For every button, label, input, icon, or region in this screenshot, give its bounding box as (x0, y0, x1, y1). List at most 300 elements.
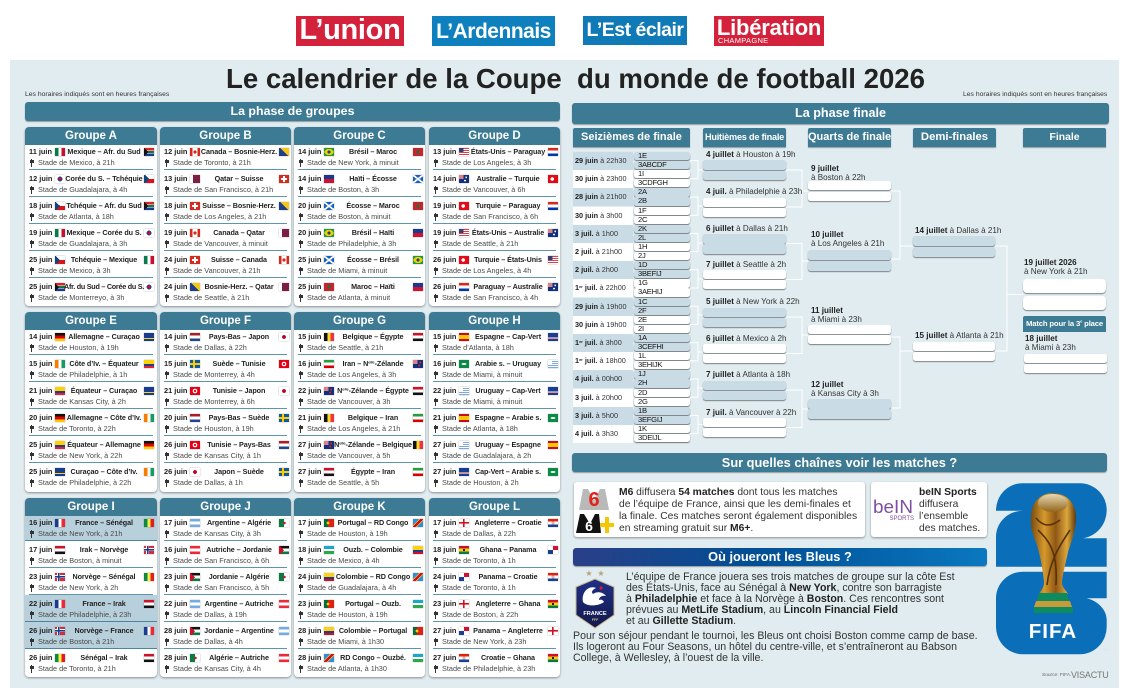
round of 16 matches: 7 juillet à Atlanta à 18h (706, 370, 790, 378)
group F matches: 15 juin (164, 359, 187, 368)
group F matches: Suède – Tunisie (212, 359, 266, 368)
group F matches: Stade de Monterrey, à 6h (173, 397, 255, 406)
icon: France team badge (576, 569, 614, 628)
heading: knockout phase (572, 103, 1109, 124)
group L matches: Stade de Philadelphie, à 23h (442, 664, 535, 673)
group A matches: 18 juin (29, 201, 52, 210)
panel: group L (429, 498, 560, 677)
group E matches: 25 juin (29, 467, 52, 476)
group H matches: Stade d’Atlanta, à 18h (442, 343, 514, 352)
group L heading: Groupe L (469, 501, 520, 513)
icon: beIN Sports logo: SPORTS (889, 516, 914, 522)
group D matches: États-Unis – Australie (472, 228, 544, 237)
FIFA 26 logo with trophy (996, 483, 1108, 654)
group I matches, France games highlighted: Stade de New York, à 2h (38, 583, 118, 592)
heading: TV channels: Sur quelles chaînes voir les matches ? (722, 455, 957, 470)
group E matches: Équateur – Curaçao (71, 386, 137, 395)
group F matches: Stade de Houston, à 19h (173, 424, 254, 433)
panel: group C (294, 127, 425, 306)
round of 32 matches: 1L (638, 351, 646, 360)
round of 32 matches: 30 juin à 3h00 (575, 211, 622, 220)
FIFA wordmark: FIFA (1029, 620, 1077, 643)
third place heading (1023, 316, 1106, 332)
M6 text: en streaming gratuit sur M6+. (619, 523, 753, 534)
group H matches: Stade de Miami, à minuit (442, 370, 522, 379)
group K matches: Ouzb. – Colombie (343, 545, 403, 554)
round of 32 matches: 1H (638, 242, 647, 251)
group I matches, France games highlighted: 23 juin (29, 572, 52, 581)
group J matches: Stade de Kansas City, à 3h (173, 529, 261, 538)
group A heading: Groupe A (65, 130, 117, 142)
group K matches (298, 518, 424, 673)
group D matches: 13 juin (433, 147, 456, 156)
group C matches: 14 juin (298, 174, 321, 183)
final match: 19 juillet 2026 (1024, 258, 1077, 267)
group C matches: Stade de Miami, à minuit (307, 266, 387, 275)
source credit: Source: FIFA. (1042, 673, 1071, 678)
group G matches: Stade de Seattle, à 21h (307, 343, 383, 352)
group G matches: Stade de Vancouver, à 5h (307, 451, 390, 460)
round of 32 matches: 3DEIJL (638, 433, 661, 442)
group E matches: Équateur – Allemagne (67, 440, 141, 449)
group E matches: Stade de New York, à 22h (38, 451, 122, 460)
group A matches: Stade de Atlanta, à 18h (38, 212, 114, 221)
logo: L'union: L’union (300, 14, 400, 46)
group A matches: Stade de Guadalajara, à 3h (38, 239, 127, 248)
group F matches: Pays-Bas – Japon (209, 332, 269, 341)
round of 32 matches: 2J (638, 251, 646, 260)
group C heading: Groupe C (333, 130, 386, 142)
note: time zone right: Les horaires indiqués sont en heures françaises (963, 91, 1107, 98)
group F matches: 14 juin (164, 332, 187, 341)
group C matches: Stade de New York, à minuit (307, 158, 399, 167)
beIN text: diffusera (919, 499, 958, 510)
group A matches: Mexique – Afr. du Sud (67, 147, 141, 156)
group K matches: Stade de Houston, à 19h (307, 529, 388, 538)
group A matches: Stade de Mexico, à 21h (38, 158, 115, 167)
group K matches: Portugal – Ouzb. (345, 599, 401, 608)
group F heading (160, 312, 291, 330)
group K matches: RD Congo – Ouzbé. (340, 653, 406, 662)
round of 16 matches: 4 juillet à Houston à 19h (706, 150, 796, 158)
group L matches: Stade de Dallas, à 22h (442, 529, 516, 538)
group H heading: Groupe H (468, 315, 521, 327)
group B matches: Stade de San Francisco, à 21h (173, 185, 273, 194)
panel: group G (294, 312, 425, 492)
group B matches: 12 juin (164, 147, 187, 156)
group L matches: 17 juin (433, 518, 456, 527)
group A matches: Tchéquie – Afr. du Sud (66, 201, 142, 210)
group C matches (298, 147, 424, 302)
group F heading: Groupe F (200, 315, 251, 327)
group K matches: Portugal – RD Congo (338, 518, 408, 527)
round of 32 matches: 1J (638, 369, 646, 378)
group H matches: Uruguay – Cap-Vert (475, 386, 541, 395)
round of 32 matches: 4 juil. à 3h30 (575, 429, 618, 438)
group J matches: Jordanie – Algérie (209, 572, 269, 581)
group C matches: Stade de Boston, à minuit (307, 212, 391, 221)
group F matches: Pays-Bas – Suède (209, 413, 269, 422)
group J matches: Jordanie – Argentine (204, 626, 274, 635)
group G matches: 27 juin (298, 467, 321, 476)
group B matches: Qatar – Suisse (215, 174, 263, 183)
France text block 1: prévues au MetLife Stadium, au Lincoln Financial Field (626, 604, 898, 616)
group D matches: États-Unis – Paraguay (471, 147, 545, 156)
round of 32 matches: 3CEFHI (638, 342, 664, 351)
group F matches: Stade de Monterrey, à 4h (173, 370, 255, 379)
group J matches: Argentine – Algérie (207, 518, 271, 527)
semi final matches: 14 juillet à Dallas à 21h (915, 226, 1001, 234)
round of 16 matches: 6 juillet à Mexico à 2h (706, 334, 787, 342)
France text block 2: Ils logeront au Four Seasons, un hôtel du centre-ville, et s’entraîneront au Babson (573, 641, 957, 653)
group G matches: Stade de Vancouver, à 3h (307, 397, 390, 406)
group L matches: 27 juin (433, 653, 456, 662)
round heading: round of 16: Huitièmes de finale (705, 132, 784, 142)
group B matches: Suisse – Bosnie-Herz. (202, 201, 276, 210)
France text block 1: des États-Unis, face au Sénégal à New York, contre son barragiste (626, 582, 942, 594)
panel: group J (160, 498, 291, 677)
group H matches: 27 juin (433, 467, 456, 476)
group I matches, France games highlighted (25, 516, 157, 673)
round heading: round of 32: Seizièmes de finale (581, 131, 682, 143)
group J matches: Stade de San Francisco, à 5h (173, 583, 269, 592)
panel: beIN Sports broadcast (871, 482, 987, 537)
group H matches: Espagne – Arabie s. (475, 413, 541, 422)
group A matches: Corée du S. – Tchéquie (65, 174, 143, 183)
panel: group E (25, 312, 157, 492)
group D matches: Stade de Los Angeles, à 3h (442, 158, 531, 167)
round heading: final: Finale (1049, 132, 1080, 143)
group G matches: 22 juin (298, 386, 321, 395)
group K heading (294, 498, 425, 516)
group F matches: Stade de Dallas, à 1h (173, 478, 243, 487)
group I matches, France games highlighted: Stade de Boston, à 21h (38, 637, 114, 646)
round of 32 matches: 3 juil. à 20h00 (575, 393, 622, 402)
group I matches, France games highlighted: 26 juin (29, 626, 52, 635)
group J heading: Groupe J (200, 501, 251, 513)
group H matches: 22 juin (433, 386, 456, 395)
source credit (1042, 670, 1109, 680)
group B matches: 13 juin (164, 174, 187, 183)
group I heading (25, 498, 157, 516)
group I matches, France games highlighted: Sénégal – Irak (80, 653, 128, 662)
group J matches: 17 juin (164, 518, 187, 527)
group B matches: Canada – Bosnie-Herz. (201, 147, 277, 156)
group L matches: Angleterre – Ghana (476, 599, 540, 608)
group C matches: Brésil – Haïti (352, 228, 394, 237)
group C matches: Brésil – Maroc (349, 147, 397, 156)
group H matches: Stade de Guadalajara, à 2h (442, 451, 531, 460)
group C matches: 20 juin (298, 228, 321, 237)
group C matches: Stade de Atlanta, à minuit (307, 293, 390, 302)
group G matches: Iran – Nelle-Zélande (342, 359, 404, 368)
group E heading (25, 312, 157, 330)
group I matches, France games highlighted: 16 juin (29, 518, 52, 527)
group D matches (433, 147, 558, 302)
group B matches: Stade de Seattle, à 21h (173, 293, 249, 302)
heading: TV channels (572, 453, 1107, 472)
group L matches (433, 518, 558, 673)
round of 32 matches: 29 juin à 19h00 (575, 302, 627, 311)
group A matches: Stade de Mexico, à 3h (38, 266, 111, 275)
round heading: round of 32 (573, 128, 690, 147)
group J matches: 28 juin (164, 653, 187, 662)
group D matches: Stade de San Francisco, à 4h (442, 293, 538, 302)
semi final matches (912, 226, 1004, 362)
round heading: final (1023, 128, 1106, 147)
group H matches: 27 juin (433, 440, 456, 449)
note: time zone left: Les horaires indiqués sont en heures françaises (25, 91, 169, 98)
panel: M6 broadcast (574, 482, 865, 537)
heading: group stage: La phase de groupes (231, 104, 354, 118)
group H matches: Stade de Houston, à 2h (442, 478, 519, 487)
group J matches: 16 juin (164, 545, 187, 554)
group J heading (160, 498, 291, 516)
group H matches: 15 juin (433, 332, 456, 341)
group E matches: Côte d’Iv. – Équateur (69, 359, 139, 368)
group A matches (29, 147, 154, 302)
group A matches: Tchéquie – Mexique (71, 255, 137, 264)
round of 32 matches: 1E (638, 151, 647, 160)
group B matches: Stade de Vancouver, à 21h (173, 266, 260, 275)
group G matches: 15 juin (298, 332, 321, 341)
round of 32 matches: 3EFGIJ (638, 415, 662, 424)
group E matches: 15 juin (29, 359, 52, 368)
group D heading: Groupe D (468, 130, 521, 142)
group I matches, France games highlighted: 17 juin (29, 545, 52, 554)
round of 32 matches: 3CDFGH (638, 178, 668, 187)
final match: à New York à 21h (1024, 266, 1087, 276)
group A matches: 19 juin (29, 228, 52, 237)
group G matches: Nelle-Zélande – Belgique (334, 440, 412, 449)
group A matches: 12 juin (29, 174, 52, 183)
group J matches: Stade de San Francisco, à 6h (173, 556, 269, 565)
group L matches: Stade de Boston, à 22h (442, 610, 518, 619)
group G matches (298, 332, 424, 487)
round of 32 matches: 1er juil. à 3h00 (575, 338, 622, 347)
round of 32 matches: 1B (638, 406, 647, 415)
group C matches: 20 juin (298, 201, 321, 210)
France text block 2: College, à Wellesley, à l’ouest de la ville. (573, 652, 763, 664)
panel: group K (294, 498, 425, 677)
group D matches: 19 juin (433, 228, 456, 237)
group B matches: 18 juin (164, 201, 187, 210)
group E matches: Stade de Philadelphie, à 22h (38, 478, 131, 487)
group I matches, France games highlighted: Stade de New York, à 21h (38, 529, 122, 538)
round heading: semi finals: Demi-finales (921, 131, 988, 143)
M6 text: M6 diffusera 54 matches dont tous les matches (619, 487, 837, 498)
group J matches: Stade de Dallas, à 4h (173, 637, 243, 646)
group J matches: Stade de Kansas City, à 4h (173, 664, 261, 673)
quarter final matches (808, 164, 892, 420)
group G matches: 16 juin (298, 359, 321, 368)
group L matches: 27 juin (433, 626, 456, 635)
group G matches: Stade de Los Angeles, à 3h (307, 370, 396, 379)
round of 32 matches: 2B (638, 196, 647, 205)
group K matches: Stade de Guadalajara, à 4h (307, 583, 396, 592)
round of 32 matches: 2E (638, 315, 647, 324)
trophy (1031, 493, 1076, 613)
group H matches: Espagne – Cap-Vert (475, 332, 541, 341)
round of 32 matches: 30 juin à 19h00 (575, 320, 627, 329)
group C matches: 25 juin (298, 282, 321, 291)
group G matches: Stade de Seattle, à 5h (307, 478, 379, 487)
group J matches: Algérie – Autriche (209, 653, 269, 662)
quarter final matches: 9 juillet (811, 164, 839, 172)
group K matches: Colombie – RD Congo (336, 572, 410, 581)
group G matches: 27 juin (298, 440, 321, 449)
panel: group I (25, 498, 157, 677)
group H matches: Uruguay – Espagne (475, 440, 541, 449)
group E matches: 14 juin (29, 332, 52, 341)
group K matches: 18 juin (298, 545, 321, 554)
logo: Libération Champagne: CHAMPAGNE (718, 36, 768, 45)
round of 32 matches: 29 juin à 22h30 (575, 156, 627, 165)
group C matches: Maroc – Haïti (351, 282, 395, 291)
quarter final matches: à Los Angeles à 21h (811, 238, 884, 248)
round of 32 matches: 3 juil. à 1h00 (575, 229, 618, 238)
group E matches: Curaçao – Côte d’Iv. (71, 467, 137, 476)
group E matches: Allemagne – Curaçao (68, 332, 140, 341)
M6 text (619, 487, 857, 534)
round of 32 matches: 3BEFIJ (638, 269, 661, 278)
group E matches: 21 juin (29, 386, 52, 395)
group L matches: Ghana – Panama (480, 545, 536, 554)
round of 16 matches: 5 juillet à New York à 22h (706, 296, 800, 306)
group C matches: 25 juin (298, 255, 321, 264)
round of 32 matches: 2I (638, 324, 644, 333)
group D matches: Stade de Seattle, à 21h (442, 239, 518, 248)
group E matches: 20 juin (29, 413, 52, 422)
quarter final matches: 11 juillet (811, 306, 843, 314)
group H matches (433, 332, 558, 487)
group J matches: 28 juin (164, 626, 187, 635)
group D matches: 14 juin (433, 174, 456, 183)
round of 32 matches: 1C (638, 297, 647, 306)
beIN text (919, 487, 980, 534)
group K matches: 23 juin (298, 599, 321, 608)
group J matches: Stade de Dallas, à 19h (173, 610, 247, 619)
heading: where France will play (573, 548, 987, 566)
group C heading (294, 127, 425, 145)
group D matches: Stade de Los Angeles, à 4h (442, 266, 531, 275)
France text block 2 (573, 630, 978, 664)
group B matches (164, 147, 290, 302)
third place match (1023, 316, 1108, 374)
group F matches: Japon – Suède (214, 467, 264, 476)
group G matches: Belgique – Iran (348, 413, 398, 422)
round of 32 matches: 2 juil. à 21h00 (575, 247, 622, 256)
group G matches: 21 juin (298, 413, 321, 422)
group B matches: 24 juin (164, 255, 187, 264)
round of 32 matches: 1er juil. à 18h00 (575, 356, 626, 365)
round of 32 matches: 4 juil. à 00h00 (575, 374, 622, 383)
group D matches: 19 juin (433, 201, 456, 210)
group L heading (429, 498, 560, 516)
group L matches: Panama – Croatie (478, 572, 538, 581)
group B matches: Stade de Vancouver, à minuit (173, 239, 268, 248)
group D matches: Stade de Vancouver, à 6h (442, 185, 525, 194)
group I matches, France games highlighted: 26 juin (29, 653, 52, 662)
group F matches: Tunisie – Japon (213, 386, 265, 395)
heading: group stage (25, 102, 560, 121)
icon: M6 logos: 6 (588, 489, 600, 511)
quarter final matches: 12 juillet (811, 380, 843, 388)
group K matches: Stade de Mexico, à 4h (307, 556, 380, 565)
round of 32 matches: 28 juin à 21h00 (575, 192, 627, 201)
group E matches: Stade de Toronto, à 22h (38, 424, 116, 433)
semi final matches: 15 juillet à Atlanta à 21h (915, 330, 1004, 340)
group E matches: Stade de Houston, à 19h (38, 343, 119, 352)
round of 32 matches: 2K (638, 224, 647, 233)
group K matches: Stade de Miami, à 1h30 (307, 637, 384, 646)
round of 32 matches: 1G (638, 278, 648, 287)
group D heading (429, 127, 560, 145)
group L matches: 23 juin (433, 599, 456, 608)
group A matches: Stade de Guadalajara, à 4h (38, 185, 127, 194)
group L matches: Panama – Angleterre (473, 626, 543, 635)
group A matches: 25 juin (29, 282, 52, 291)
round of 32 matches: 30 juin à 23h00 (575, 174, 627, 183)
panel: group A (25, 127, 157, 306)
round of 32 matches: 2G (638, 397, 648, 406)
group C matches: Écosse – Brésil (347, 255, 399, 264)
beIN text: des matches. (919, 523, 980, 534)
M6 text: de l’équipe de France, ainsi que les demi-finales et (619, 499, 851, 510)
group K matches: Stade de Atlanta, à 1h30 (307, 664, 387, 673)
group K matches: Colombie – Portugal (339, 626, 407, 635)
group F matches (164, 332, 290, 487)
France text block 1 (626, 571, 955, 627)
group H matches: 21 juin (433, 413, 456, 422)
round of 16 matches: 4 juil. à Philadelphie à 23h (706, 186, 802, 196)
group G matches: Égypte – Iran (351, 467, 395, 476)
round of 32 matches: 1D (638, 260, 647, 269)
group I matches, France games highlighted: 22 juin (29, 599, 52, 608)
group H matches: 16 juin (433, 359, 456, 368)
round of 32 matches: 2F (638, 306, 646, 315)
group H matches: Arabie s. – Uruguay (475, 359, 541, 368)
group F matches: 20 juin (164, 413, 187, 422)
quarter final matches: à Kansas City à 3h (811, 388, 879, 398)
group J matches: 22 juin (164, 599, 187, 608)
group A heading (25, 127, 157, 145)
round of 32 matches: 3AEHIJ (638, 287, 662, 296)
group E matches: Stade de Kansas City, à 2h (38, 397, 126, 406)
quarter final matches: à Miami à 23h (811, 314, 862, 324)
trademark sign: TM (1102, 647, 1108, 652)
group D matches: 26 juin (433, 282, 456, 291)
M6 text: la finale. Ces matches seront également disponibles (619, 511, 857, 522)
group I matches, France games highlighted: Norvège – Sénégal (73, 572, 135, 581)
group D matches: Stade de San Francisco, à 6h (442, 212, 538, 221)
round of 32 matches: 1F (638, 206, 646, 215)
group B matches: Stade de Los Angeles, à 21h (173, 212, 266, 221)
group A matches: 25 juin (29, 255, 52, 264)
group E heading: Groupe E (65, 315, 117, 327)
group C matches: Stade de Philadelphie, à 3h (307, 239, 396, 248)
group K matches: 17 juin (298, 518, 321, 527)
group L matches: Stade de New York, à 23h (442, 637, 526, 646)
round of 32 matches: 3 juil. à 5h00 (575, 411, 618, 420)
round of 32 matches: 2D (638, 388, 647, 397)
group L matches: Stade de Toronto, à 1h (442, 583, 516, 592)
round heading: semi finals (913, 128, 996, 147)
group D matches: Turquie – Paraguay (476, 201, 540, 210)
quarter final matches: à Boston à 22h (811, 172, 865, 182)
title: Le calendrier de la Coupe du monde de football 2026 (226, 63, 925, 94)
group I matches, France games highlighted: Stade de Toronto, à 21h (38, 664, 116, 673)
